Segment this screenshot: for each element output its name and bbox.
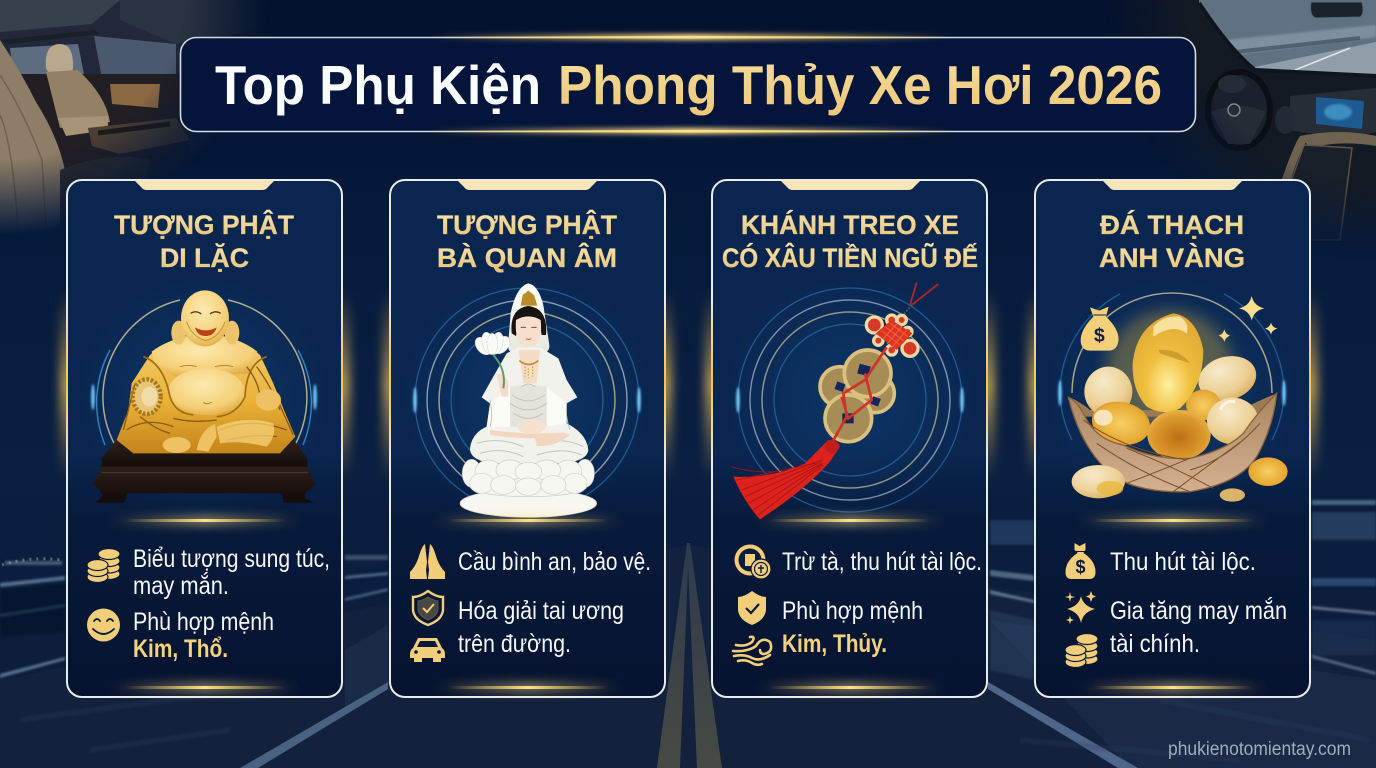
prayer beads [133, 379, 161, 414]
text: attracts fortune: Thu hút tài lộc. [1110, 548, 1256, 576]
panel: Khánh treo xe [711, 180, 988, 697]
veil [508, 283, 549, 353]
gold crown [521, 291, 537, 306]
rearview mirror [1311, 2, 1363, 18]
title text: Top Phụ Kiện [215, 54, 541, 116]
website watermark: phukienotomientay.com [1168, 739, 1351, 760]
statue: Guanyin [460, 283, 597, 517]
heading: BÀ QUAN ÂM [437, 242, 617, 273]
red cords through coins [832, 347, 887, 443]
text: suitable elements: Kim, Thổ. [133, 635, 228, 663]
halo rings [736, 288, 964, 512]
halo rings [91, 300, 317, 445]
icon: money bag: $ [1075, 557, 1086, 577]
rear bowl rim [1068, 393, 1277, 417]
icon: ancient coin [734, 544, 771, 579]
bowl front [1068, 393, 1277, 492]
big stone [1133, 313, 1203, 412]
heading: ANH VÀNG [1099, 242, 1245, 273]
sparkles [1219, 296, 1277, 342]
bottom divider [110, 683, 300, 692]
heading: TƯỢNG PHẬT [437, 209, 617, 240]
text: wards off evil, attracts fortune: Trừ tà, thu hút tài lộc. [782, 548, 982, 576]
statue: laughing Buddha [93, 290, 315, 503]
cream knot loops [866, 315, 918, 356]
heading: CÓ XÂU TIỀN NGŨ ĐẾ [722, 242, 978, 273]
face [516, 316, 541, 347]
robe and body [117, 335, 295, 453]
panel: Tượng Phật Di Lặc [66, 180, 343, 697]
front stones [1088, 396, 1154, 450]
car interior top right [1148, 0, 1376, 241]
heading: ĐÁ THẠCH [1100, 209, 1244, 240]
coin square holes [835, 364, 881, 423]
halo rings [413, 288, 641, 512]
top tab [457, 180, 598, 190]
icon: praying hands [410, 544, 445, 579]
icon: money bag [1066, 543, 1096, 579]
text: suitable elements [133, 608, 274, 663]
text: neutralising road dangers: Hóa giải tai ương [458, 597, 624, 625]
lotus flower [493, 355, 504, 388]
head [181, 290, 229, 346]
coins [820, 350, 894, 442]
divider [1078, 516, 1268, 525]
divider [110, 516, 300, 525]
text: boosts financial luck: tài chính. [1110, 630, 1200, 658]
icon: wind waves [733, 637, 771, 665]
title text [215, 54, 1162, 116]
text: neutralising road dangers [458, 597, 624, 658]
loose stones [1072, 465, 1125, 498]
top tab [780, 180, 921, 190]
heading [437, 209, 617, 273]
screen [1316, 97, 1364, 129]
text: symbol of abundance [133, 545, 330, 600]
bottom divider [433, 683, 623, 692]
hair [511, 306, 546, 336]
back stones [1084, 367, 1132, 417]
text: suitable elements: Phù hợp mệnh [133, 608, 274, 636]
steering wheel [1208, 72, 1270, 148]
motion streaks on road [20, 690, 1370, 760]
title text: Phong Thủy Xe Hơi 2026 [558, 54, 1162, 116]
text: boosts financial luck [1110, 596, 1287, 658]
ears [171, 321, 186, 345]
robe [470, 347, 588, 463]
red knot [876, 320, 912, 350]
wooden base [93, 442, 315, 503]
windshield [1199, 0, 1376, 76]
tassel [733, 440, 840, 519]
icon: coins [87, 548, 120, 582]
icon: sparkles [1065, 591, 1096, 624]
money bag [1081, 307, 1119, 351]
icon: outline shield [413, 591, 443, 625]
panel: Tượng Phật Bà Quan Âm [389, 180, 666, 697]
text: symbol of abundance: Biểu tượng sung túc, [133, 545, 330, 573]
heading [1099, 209, 1245, 273]
dashboard console [1290, 88, 1376, 136]
icon: smiley [87, 608, 120, 642]
icon: car [410, 638, 445, 662]
divider [755, 516, 945, 525]
panel: Đá Thạch Anh Vàng [1034, 180, 1311, 697]
chest and necklace [518, 350, 540, 383]
road surface [0, 545, 1376, 768]
divider [433, 516, 623, 525]
robe folds [477, 384, 583, 457]
white side road lines [240, 682, 388, 768]
crossed leg and hands [490, 430, 570, 446]
folded legs and feet [163, 437, 191, 453]
top tab [1102, 180, 1243, 190]
icon: coins [1065, 634, 1098, 668]
text: suitable elements [782, 597, 923, 658]
text: neutralising road dangers: trên đường. [458, 630, 571, 658]
icon: solid shield [738, 591, 766, 625]
text: prayer for safety: Cầu bình an, bảo vệ. [458, 548, 651, 576]
citrine bowl with gold stones [1068, 296, 1288, 502]
text: boosts financial luck: Gia tăng may mắn [1110, 596, 1287, 625]
halo rings [1058, 293, 1286, 440]
heading: TƯỢNG PHẬT [114, 209, 294, 240]
side glows of the cards [60, 290, 1318, 480]
heading [114, 209, 294, 273]
center road lines [657, 543, 689, 768]
money bag: $ [1094, 325, 1105, 346]
heading: KHÁNH TREO XE [741, 209, 959, 240]
heading: DI LẶC [160, 242, 249, 273]
top cords [910, 283, 938, 305]
car interior top left [0, 0, 251, 230]
right hand [256, 389, 281, 411]
top tab [134, 180, 275, 190]
bottom divider [755, 683, 945, 692]
text: symbol of abundance: may mắn. [133, 571, 229, 600]
side highway streaks [0, 500, 1376, 680]
charm: knot, three coins and tassel [732, 283, 938, 519]
bottom divider [1078, 683, 1268, 692]
title banner [180, 34, 1196, 134]
text: suitable elements: Kim, Thủy. [782, 630, 887, 658]
text: suitable elements: Phù hợp mệnh [782, 597, 923, 625]
heading [722, 209, 978, 273]
lotus base [460, 459, 597, 517]
